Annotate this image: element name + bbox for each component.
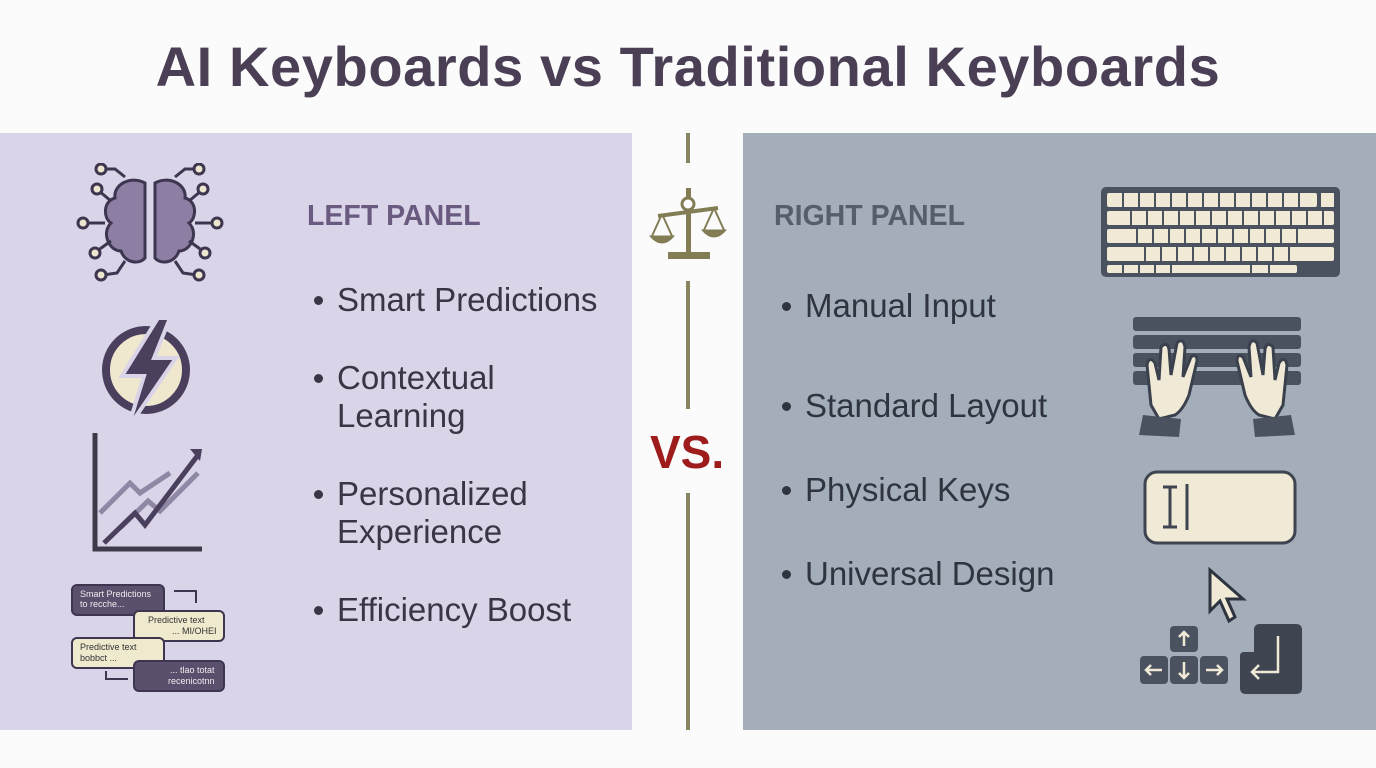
icon: hands typing (1133, 317, 1301, 437)
bullet: standard layout: Standard Layout (805, 387, 1047, 424)
icon: keyboard (1101, 187, 1340, 277)
bullet: manual input: Manual Input (805, 287, 996, 324)
icon: scales (649, 188, 727, 259)
heading: right panel: RIGHT PANEL (774, 200, 965, 232)
bullet: physical keys: Physical Keys (805, 471, 1010, 508)
bullet: personalized experience (337, 475, 528, 551)
icon: predictive text bubbles: recenicotnn (168, 676, 215, 686)
panel: right (743, 133, 1376, 730)
bullet: universal design: Universal Design (805, 555, 1054, 592)
icon: brain circuit (76, 163, 224, 282)
icon: mouse pointer (1208, 567, 1247, 624)
icon: predictive text bubbles (71, 584, 225, 692)
icon: predictive text bubbles: to recche... (80, 599, 125, 609)
icon: lightning (102, 320, 190, 416)
icon: predictive text bubbles: bobbct ... (80, 653, 117, 663)
icon: predictive text bubbles: Smart Predictions (80, 589, 152, 599)
bullet: contextual learning (337, 359, 495, 435)
icon: predictive text bubbles: Predictive text (148, 615, 205, 625)
bullet: personalized experience: Personalized (337, 475, 528, 512)
title: AI Keyboards vs Traditional Keyboards (156, 35, 1220, 98)
divider line (686, 133, 690, 730)
panel: left (0, 133, 632, 730)
bullet: efficiency boost: Efficiency Boost (337, 591, 571, 628)
bullet: contextual learning: Learning (337, 397, 465, 434)
icon: growth chart (92, 433, 202, 552)
icon: text cursor field (1144, 470, 1296, 544)
heading: left panel: LEFT PANEL (307, 200, 481, 232)
bullet: personalized experience: Experience (337, 513, 502, 550)
vs label: VS. (650, 426, 724, 478)
bullet: contextual learning: Contextual (337, 359, 495, 396)
bullet: smart predictions: Smart Predictions (337, 281, 597, 318)
icon: arrow and enter keys (1140, 624, 1302, 694)
icon: predictive text bubbles: Predictive text (80, 642, 137, 652)
icon: predictive text bubbles: ... MI/OHEI (172, 626, 217, 636)
icon: predictive text bubbles: ... tlao totat (170, 665, 215, 675)
